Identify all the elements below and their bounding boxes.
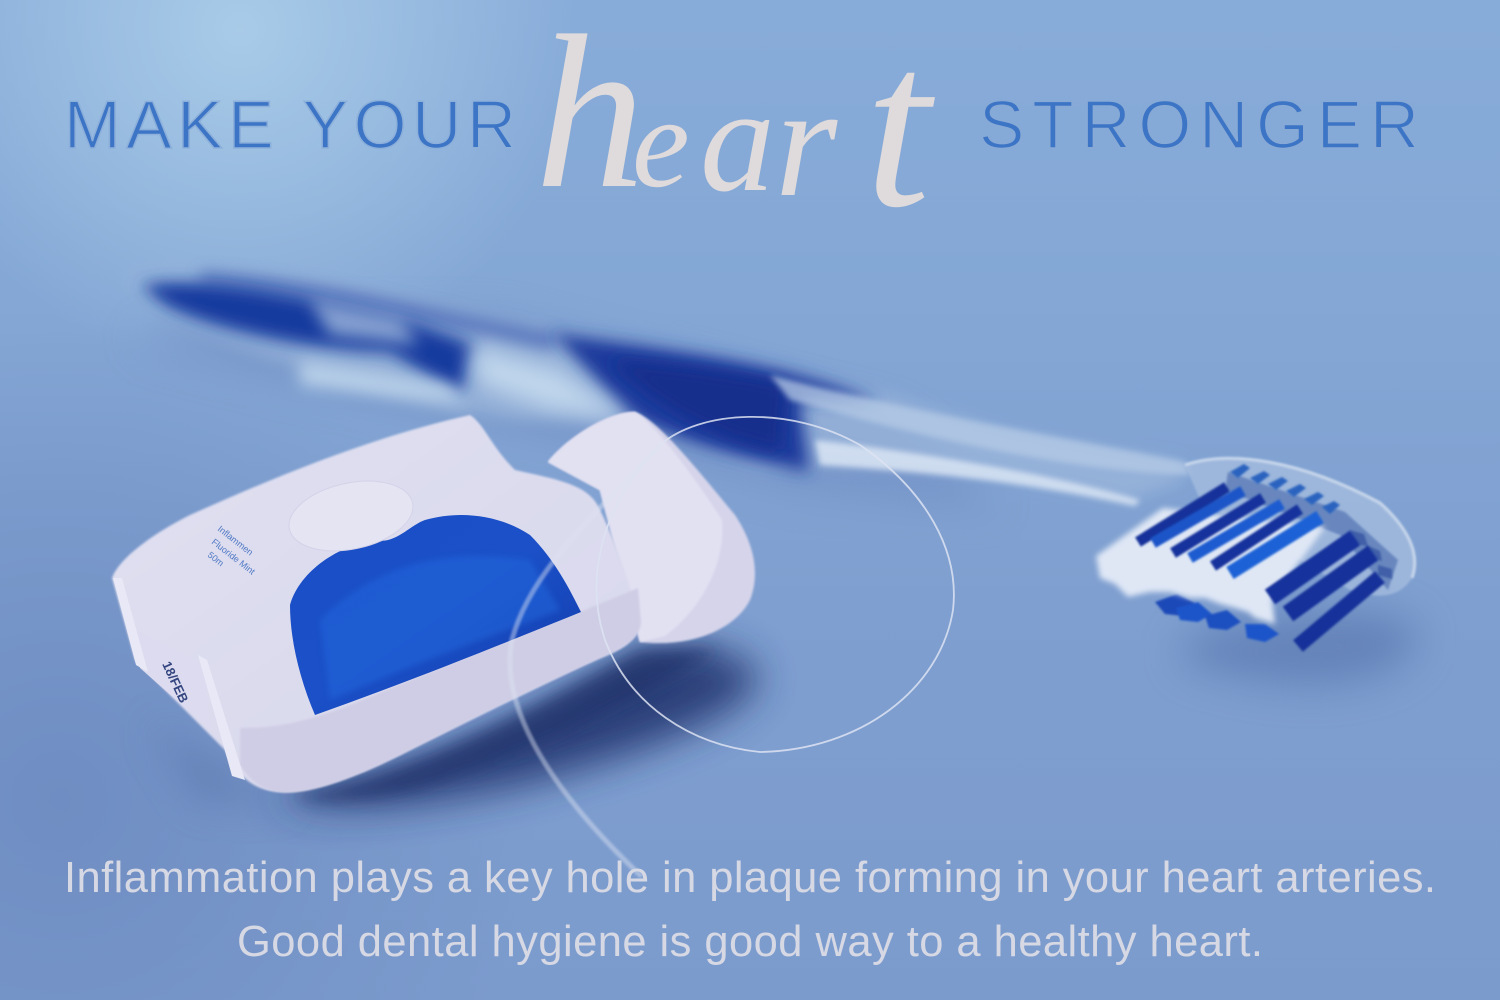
floss box xyxy=(112,415,641,792)
floss box: 50m xyxy=(206,550,226,568)
box lower band xyxy=(240,588,641,792)
title: heart script: t xyxy=(865,0,935,256)
toothbrush head xyxy=(1096,458,1420,686)
white bristles xyxy=(1096,508,1325,624)
title: stronger: STRONGER xyxy=(979,87,1419,163)
floss lid xyxy=(548,412,755,643)
blue window xyxy=(290,515,581,715)
floss box: 18/FEB xyxy=(159,659,192,705)
lower bristles xyxy=(1155,594,1279,642)
title: heart script: r xyxy=(775,52,838,230)
caption line 2: Good dental hygiene is good way to a healthy heart. xyxy=(237,918,1263,966)
title: make your: MAKE YOUR xyxy=(64,87,516,163)
floss box: Fluoride Mint xyxy=(210,537,257,577)
shadow under floss box xyxy=(150,648,760,807)
dial button xyxy=(283,471,419,561)
title: heart script: e xyxy=(632,71,690,215)
toothbrush handle xyxy=(130,268,1190,510)
upper bristles xyxy=(1138,487,1380,646)
caption line 1: Inflammation plays a key hole in plaque forming in your heart arteries. xyxy=(64,854,1436,902)
dental floss thread xyxy=(510,417,954,875)
box printed text: Inflammen xyxy=(216,524,255,557)
title: heart script: a xyxy=(700,57,775,223)
label tab xyxy=(135,630,210,730)
